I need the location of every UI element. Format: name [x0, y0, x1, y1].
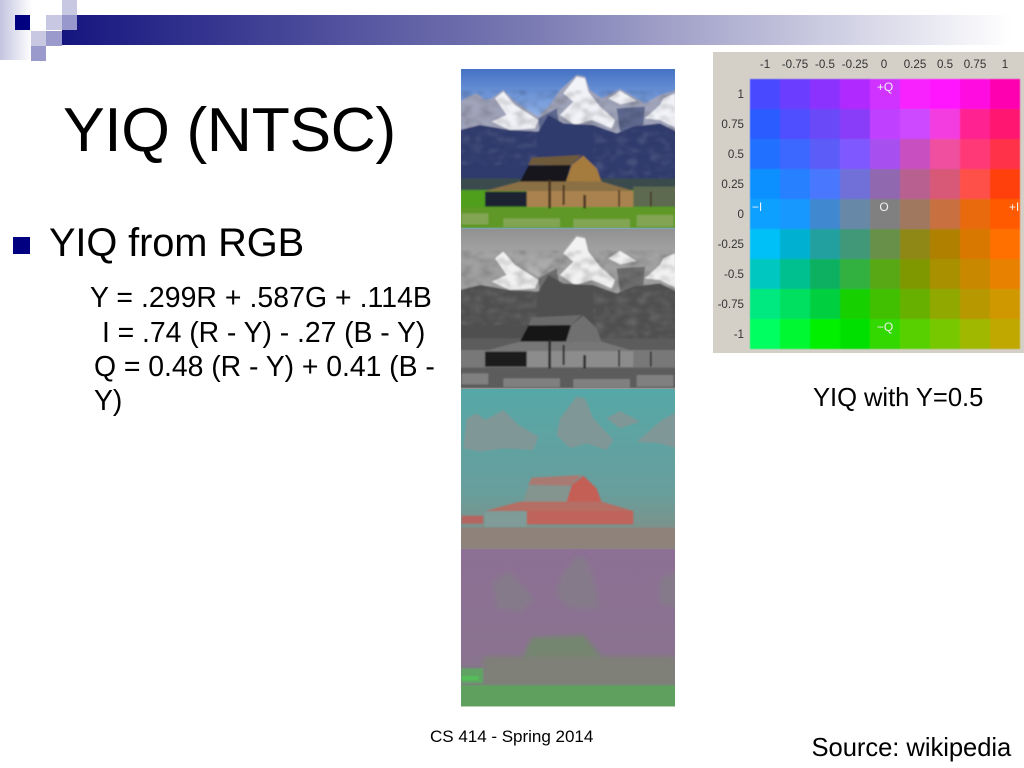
- left axis labels: 1: [738, 88, 744, 101]
- top axis labels: 0.5: [937, 58, 953, 71]
- photo: Q chroma channel: [460, 545, 677, 712]
- image strip: RGB, Y, I, Q channels: [461, 69, 675, 706]
- footer centre text: CS 414 - Spring 2014: [430, 727, 593, 746]
- axis markers inside grid: +Q: [877, 80, 893, 94]
- formula block: I = .74 (R - Y) - .27 (B - Y): [102, 317, 425, 349]
- left axis labels: [718, 88, 744, 341]
- formula block: Y = .299R + .587G + .114B: [90, 282, 432, 314]
- photo: full colour barn: [460, 65, 677, 232]
- left axis labels: 0.75: [721, 118, 744, 131]
- colour grid: [750, 79, 1020, 349]
- top axis labels: -1: [760, 58, 770, 71]
- left axis labels: 0.25: [721, 178, 744, 191]
- photo: Y luminance channel: [460, 225, 677, 392]
- axis markers inside grid: −I: [752, 200, 762, 214]
- top axis labels: 1: [1002, 58, 1008, 71]
- axis markers inside grid: [752, 80, 1019, 334]
- top axis labels: -0.25: [842, 58, 868, 71]
- header decoration: gradient band and squares: [0, 0, 982, 61]
- top axis labels: [760, 58, 1008, 71]
- formula block: Q = 0.48 (R - Y) + 0.41 (B -: [94, 351, 435, 383]
- bullet marker: [13, 237, 30, 254]
- formula block: [90, 282, 435, 417]
- axis markers inside grid: O: [879, 200, 889, 214]
- photo: I chroma channel: [460, 385, 677, 552]
- left axis labels: -0.75: [718, 298, 744, 311]
- left axis labels: -0.25: [718, 238, 744, 251]
- left axis labels: 0.5: [728, 148, 744, 161]
- chart caption: YIQ with Y=0.5: [813, 384, 983, 412]
- axis markers inside grid: −Q: [877, 320, 893, 334]
- top axis labels: 0.25: [904, 58, 926, 71]
- bullet heading: YIQ from RGB: [49, 220, 304, 264]
- top axis labels: 0.75: [964, 58, 986, 71]
- source note: Source: wikipedia: [812, 734, 1011, 762]
- title: YIQ (NTSC): [63, 95, 396, 165]
- top axis labels: -0.5: [815, 58, 835, 71]
- left axis labels: -1: [734, 328, 744, 341]
- top axis labels: 0: [881, 58, 887, 71]
- axis markers inside grid: +I: [1009, 200, 1019, 214]
- left axis labels: -0.5: [724, 268, 744, 281]
- left axis labels: 0: [738, 208, 744, 221]
- formula block: Y): [94, 385, 122, 417]
- top axis labels: -0.75: [782, 58, 808, 71]
